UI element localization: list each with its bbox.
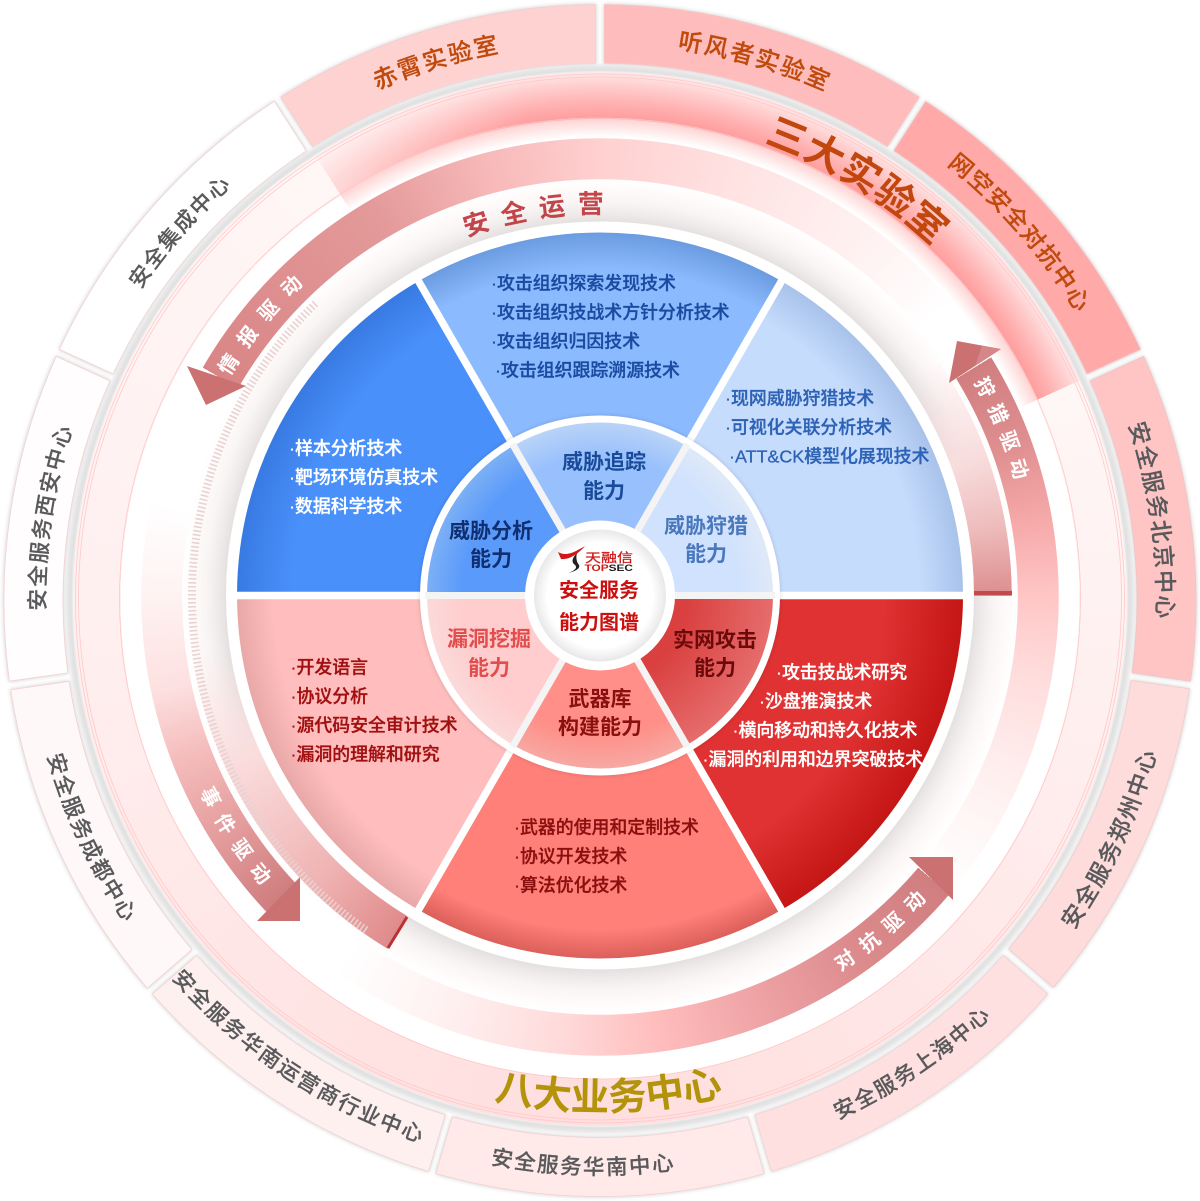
text: 威胁分析 techniques: ·数据科学技术 bbox=[289, 496, 402, 516]
inner sector: 实网攻击 bbox=[600, 596, 773, 745]
icon: TOPSEC logo: 天融信 bbox=[585, 551, 633, 565]
text: 威胁狩猎 techniques: ·可视化关联分析技术 bbox=[725, 418, 892, 438]
text: 威胁追踪 techniques: ·攻击组织归因技术 bbox=[491, 332, 640, 352]
text: 漏洞挖掘 techniques: ·协议分析 bbox=[290, 686, 368, 706]
arrow: 情报驱动 bbox=[187, 276, 302, 405]
inner sector: 漏洞挖掘 bbox=[427, 596, 600, 745]
text: 威胁狩猎 techniques: ·ATT&CK模型化展现技术 bbox=[729, 446, 930, 466]
text: 威胁追踪 techniques: ·攻击组织跟踪溯源技术 bbox=[495, 360, 680, 380]
glow: pink halo below 三大实验室 band bbox=[341, 118, 1037, 406]
segment: 安全服务西安中心: 安全服务西安中心 bbox=[26, 428, 72, 610]
label: 漏洞挖掘能力 bbox=[447, 628, 531, 680]
arrow: 对抗驱动 bbox=[834, 857, 953, 972]
arrow: 对抗驱动: 对抗驱动 bbox=[834, 891, 926, 972]
segment: 安全服务郑州中心: 安全服务郑州中心 bbox=[1060, 752, 1156, 929]
segment: 赤霄实验室: 赤霄实验室 bbox=[374, 34, 498, 90]
text: 武器库 techniques bbox=[514, 818, 699, 896]
label: 武器库构建能力 bbox=[558, 688, 642, 739]
text: 威胁分析 techniques: ·靶场环境仿真技术 bbox=[289, 468, 438, 488]
segment: 安全服务北京中心 bbox=[1089, 355, 1198, 683]
chart: six outer capability sectors bbox=[226, 222, 974, 970]
inner sector: 威胁追踪 bbox=[514, 423, 686, 596]
arrow: 狩猎驱动 bbox=[949, 341, 1030, 479]
text: 威胁追踪 techniques: ·攻击组织探索发现技术 bbox=[491, 274, 676, 294]
text: 实网攻击 techniques bbox=[702, 662, 923, 770]
segment: 赤霄实验室 bbox=[280, 2, 598, 148]
text: 武器库 techniques: ·武器的使用和定制技术 bbox=[514, 818, 699, 838]
sector: 武器库构建 bbox=[418, 596, 782, 959]
arrow: 狩猎驱动: 狩猎驱动 bbox=[973, 375, 1030, 479]
text: 实网攻击 techniques: ·漏洞的利用和边界突破技术 bbox=[702, 750, 923, 770]
label: 威胁狩猎能力: 威胁狩猎 bbox=[664, 515, 748, 538]
text: 实网攻击 techniques: ·沙盘推演技术 bbox=[759, 692, 872, 712]
label: 漏洞挖掘能力: 漏洞挖掘 bbox=[447, 628, 531, 651]
text: 威胁分析 techniques: ·样本分析技术 bbox=[289, 438, 402, 458]
arrow: 情报驱动: 情报驱动 bbox=[216, 276, 302, 375]
text: 漏洞挖掘 techniques: ·开发语言 bbox=[290, 658, 368, 678]
title: 安全服务能力图谱: 安全服务 bbox=[559, 578, 639, 602]
label: 安全运营: 安全运营 bbox=[462, 190, 602, 238]
text: 武器库 techniques: ·协议开发技术 bbox=[514, 846, 627, 866]
text: 漏洞挖掘 techniques bbox=[290, 658, 458, 764]
sector: 漏洞挖掘 bbox=[237, 596, 600, 910]
label: 实网攻击能力 bbox=[673, 628, 757, 680]
text: 武器库 techniques: ·算法优化技术 bbox=[514, 876, 627, 896]
segment: 安全服务成都中心 bbox=[9, 680, 193, 990]
text: 威胁分析 techniques bbox=[289, 438, 438, 516]
arrow bodies: 情报 事件 对抗 狩猎 drive ring bbox=[141, 138, 1059, 1056]
label: 威胁追踪能力 bbox=[562, 450, 646, 503]
text: 实网攻击 techniques: ·攻击技战术研究 bbox=[776, 662, 907, 682]
sector: 实网攻击 bbox=[600, 596, 963, 910]
segment: 网空安全对抗中心: 网空安全对抗中心 bbox=[947, 152, 1086, 311]
label: 漏洞挖掘能力: 能力 bbox=[468, 657, 510, 680]
ring: 三大实验室 band base bbox=[120, 72, 1080, 1078]
segment: 听风者实验室 bbox=[602, 2, 920, 148]
label: 威胁分析能力: 威胁分析 bbox=[449, 520, 533, 543]
sector: 威胁狩猎 bbox=[600, 281, 963, 596]
text: 实网攻击 techniques: ·横向移动和持久化技术 bbox=[732, 720, 917, 740]
segment: 安全服务成都中心: 安全服务成都中心 bbox=[46, 753, 133, 920]
title: 安全服务能力图谱 bbox=[559, 578, 639, 634]
text: 漏洞挖掘 techniques: ·漏洞的理解和研究 bbox=[290, 744, 440, 764]
heading: 三大实验室: 三大实验室 bbox=[766, 116, 951, 246]
icon: TOPSEC logo: TOP SEC bbox=[584, 563, 634, 573]
segment: 安全服务华南中心: 安全服务华南中心 bbox=[492, 1148, 674, 1176]
label: 威胁分析能力: 能力 bbox=[470, 548, 512, 571]
outlines: thin pink rims of 八大业务中心 band bbox=[76, 74, 1124, 1123]
label: 威胁狩猎能力: 能力 bbox=[685, 543, 727, 566]
band: grey-to-white shaded ring around the pie bbox=[182, 178, 1018, 1014]
segment: 安全服务上海中心: 安全服务上海中心 bbox=[832, 1010, 988, 1120]
crescent end cap: 狩猎 base line bbox=[972, 591, 1012, 595]
inner sector: 威胁分析 bbox=[427, 446, 600, 596]
label: 实网攻击能力: 实网攻击 bbox=[673, 628, 757, 652]
sector: 威胁分析 bbox=[237, 281, 600, 596]
segment: 安全服务北京中心: 安全服务北京中心 bbox=[1128, 421, 1176, 618]
crescents: fold shading beneath 狩猎 and 事件 arrows bbox=[198, 382, 1012, 949]
segment: 安全集成中心 bbox=[58, 100, 308, 376]
sector: 威胁追踪 bbox=[418, 232, 782, 596]
segment: 安全服务上海中心 bbox=[753, 954, 1049, 1173]
arrow: 事件驱动 bbox=[201, 785, 300, 921]
arrow: 事件驱动: 事件驱动 bbox=[201, 785, 271, 884]
label: 威胁追踪能力: 能力 bbox=[583, 480, 625, 503]
chart: inner capability wheel bbox=[420, 416, 780, 776]
label: 威胁分析能力 bbox=[449, 520, 533, 571]
label: 威胁追踪能力: 威胁追踪 bbox=[562, 450, 646, 474]
segment: 安全服务郑州中心 bbox=[1008, 678, 1192, 988]
segment: 安全集成中心: 安全集成中心 bbox=[128, 180, 228, 288]
text: 威胁追踪 techniques: ·攻击组织技战术方针分析技术 bbox=[491, 302, 730, 322]
text: 威胁狩猎 techniques: ·现网威胁狩猎技术 bbox=[725, 388, 874, 408]
segment: 安全服务华南中心 bbox=[434, 1116, 766, 1199]
decorative tick strip label: left hatch arc bbox=[192, 302, 366, 930]
title: 安全服务能力图谱: 能力图谱 bbox=[559, 611, 639, 634]
icon: TOPSEC logo bbox=[558, 546, 634, 573]
text: 威胁追踪 techniques bbox=[491, 274, 730, 380]
inner sector: 武器库构建 bbox=[514, 596, 686, 768]
heading: 八大业务中心: 八大业务中心 bbox=[495, 1069, 722, 1114]
segment: 网空安全对抗中心 bbox=[892, 100, 1142, 376]
segment: 听风者实验室: 听风者实验室 bbox=[679, 31, 831, 92]
text: 漏洞挖掘 techniques: ·源代码安全审计技术 bbox=[290, 714, 458, 736]
inner sector: 威胁狩猎 bbox=[600, 446, 773, 596]
segment: 安全服务西安中心 bbox=[2, 355, 110, 683]
label: 武器库构建能力: 武器库 bbox=[568, 688, 632, 711]
ring: 八大业务中心 band bbox=[73, 72, 1127, 1126]
text: 威胁狩猎 techniques bbox=[725, 388, 930, 466]
label: 威胁狩猎能力 bbox=[664, 515, 748, 566]
crescent end cap: 事件 base line bbox=[388, 917, 407, 948]
label: 武器库构建能力: 构建能力 bbox=[558, 716, 642, 739]
segment: 安全服务华南运营商行业中心: 安全服务华南运营商行业中心 bbox=[172, 968, 421, 1142]
label: 实网攻击能力: 能力 bbox=[694, 657, 736, 680]
